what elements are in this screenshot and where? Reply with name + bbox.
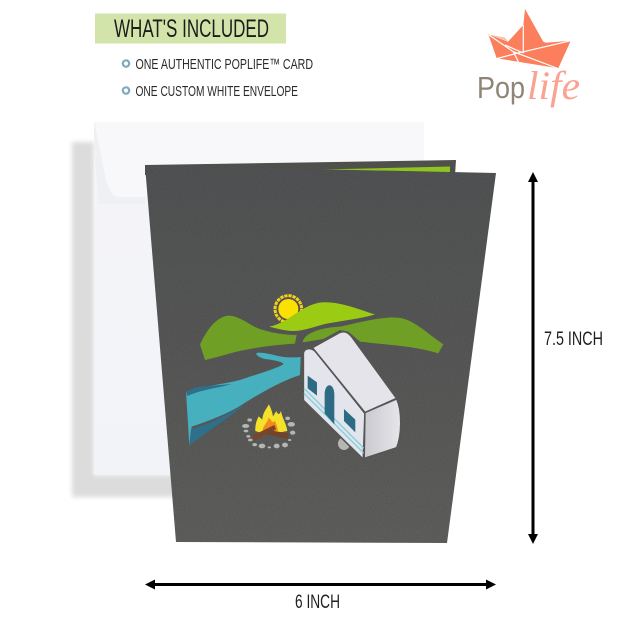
- trailer: [303, 332, 401, 459]
- card back panel: [145, 160, 456, 175]
- left hill: [200, 316, 297, 360]
- wordmark: life: [527, 63, 580, 108]
- trailer side: [303, 349, 365, 459]
- pop-up scene: [186, 296, 443, 459]
- item: envelope: [123, 83, 298, 100]
- item: envelope: ONE CUSTOM WHITE ENVELOPE: [136, 83, 298, 100]
- green inner strip: [320, 166, 450, 173]
- height label: 7.5 INCH: [544, 329, 603, 350]
- windows: [308, 376, 317, 396]
- logo: poplife: [477, 9, 580, 108]
- door: [325, 385, 334, 424]
- stone ring: [242, 417, 295, 448]
- card front: [145, 165, 496, 543]
- flames: [255, 404, 287, 434]
- heading: what's included: WHAT'S INCLUDED: [114, 15, 269, 43]
- river: [186, 353, 301, 446]
- vertical dimension arrow: [528, 172, 538, 544]
- heading: what's included: [95, 14, 286, 44]
- envelope shadow: [72, 142, 200, 497]
- logs: [252, 425, 276, 440]
- icon: origami boat: [488, 9, 571, 68]
- item: authentic card: [123, 56, 313, 73]
- wheel: [338, 437, 350, 450]
- envelope: [94, 122, 424, 475]
- included items list: [123, 56, 313, 100]
- right hill: [303, 318, 443, 353]
- campfire: [242, 404, 295, 448]
- light green hill: [269, 302, 375, 331]
- width label: 6 INCH: [295, 592, 340, 613]
- item: authentic card: ONE AUTHENTIC POPLIFE™ CARD: [136, 56, 313, 73]
- trailer roof: [312, 332, 397, 413]
- icon: sun: [275, 296, 302, 322]
- wordmark: [477, 63, 580, 108]
- trailer rear: [364, 399, 401, 458]
- horizontal dimension arrow: [145, 580, 496, 590]
- wordmark: Pop: [477, 70, 525, 105]
- trailer stripes: [304, 388, 364, 453]
- envelope flap: [95, 122, 424, 197]
